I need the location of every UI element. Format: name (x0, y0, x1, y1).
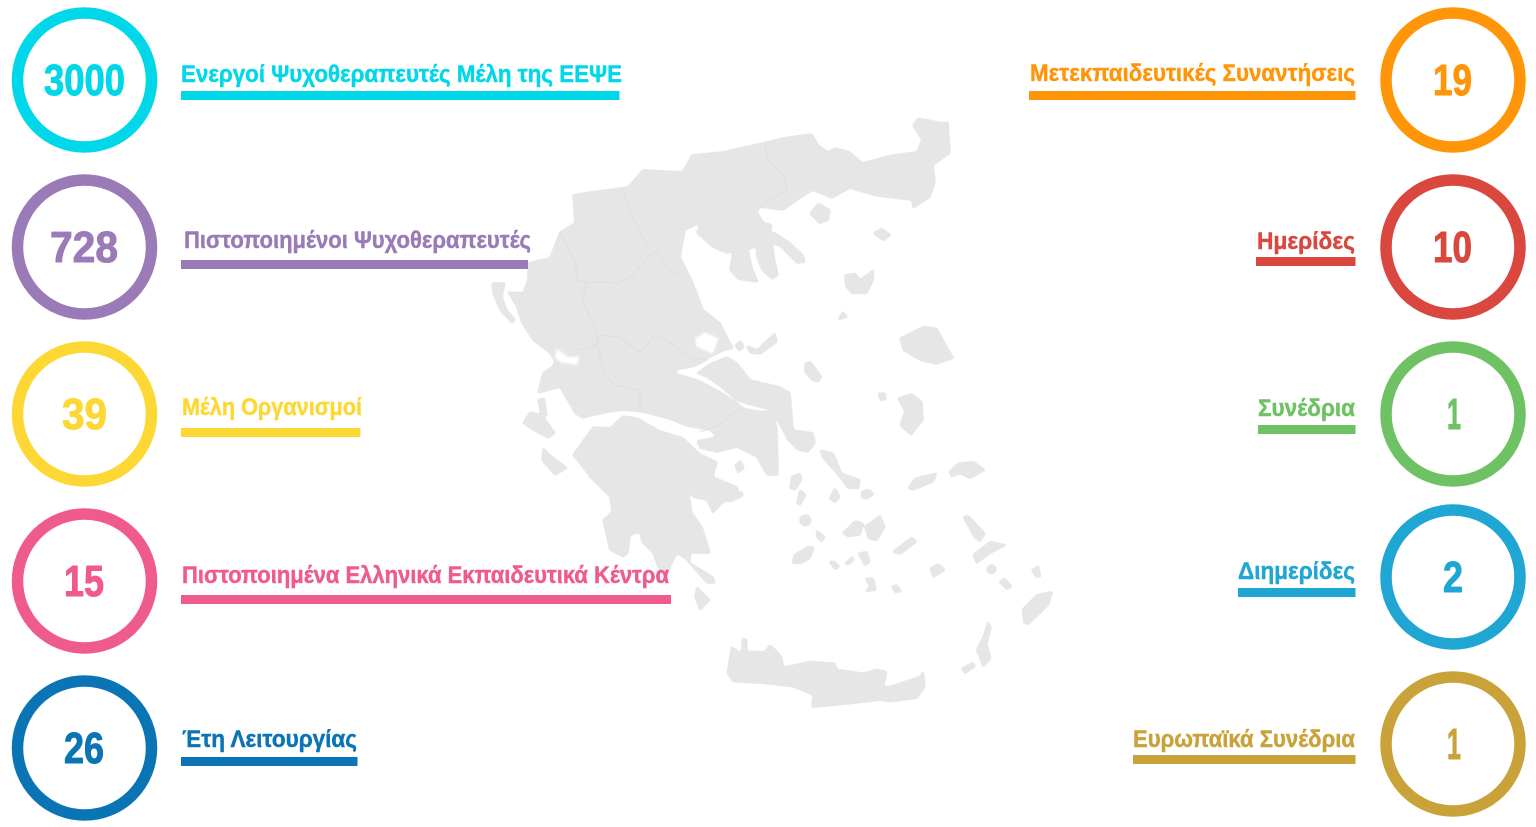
stat: one-day events: 10 (1433, 223, 1472, 272)
Ambracian gulf (556, 350, 578, 364)
stat: member organisations: 39 (62, 390, 107, 439)
stat: one-day events: Ημερίδες (1257, 228, 1355, 255)
stat: postgraduate meetings: 19 (1433, 56, 1472, 105)
Sporades, Argo-Saronic islands (735, 341, 744, 351)
Peloponnese (573, 416, 740, 583)
stat: certified training centres: 15 (64, 557, 104, 606)
Ionian islands (492, 283, 515, 323)
stat: conferences: 1 (1447, 390, 1461, 439)
north Aegean islands (805, 203, 953, 401)
stat: postgraduate meetings (1029, 13, 1520, 147)
stat: conferences (1258, 347, 1520, 481)
stat: active members (18, 13, 622, 147)
stat: two-day events: 2 (1443, 553, 1463, 602)
Chios (898, 394, 923, 435)
stat: member organisations: Μέλη Οργανισμοί (182, 394, 362, 421)
stat: european conferences (1133, 677, 1520, 811)
stat: active members: 3000 (44, 56, 125, 105)
stat: certified psychotherapists: Πιστοποιημένοι Ψυχοθεραπευτές (184, 227, 531, 254)
stat: certified training centres: Πιστοποιημένα Ελληνικά Εκπαιδευτικά Κέντρα (182, 562, 669, 589)
stat: european conferences: Ευρωπαϊκά Συνέδρια (1133, 726, 1355, 753)
stat: years of operation (18, 681, 358, 815)
stat: years of operation: 26 (64, 724, 104, 773)
stat: postgraduate meetings: Μετεκπαιδευτικές Συναντήσεις (1030, 60, 1355, 87)
stat: two-day events (1238, 510, 1520, 644)
stat: years of operation: Έτη Λειτουργίας (182, 726, 357, 753)
stat: certified psychotherapists: 728 (50, 223, 118, 272)
map of Greece (492, 118, 1052, 707)
stat: conferences: Συνέδρια (1258, 395, 1355, 422)
stat: one-day events (1256, 180, 1520, 314)
stat: european conferences: 1 (1447, 720, 1461, 769)
stat: member organisations (18, 347, 362, 481)
stat: active members: Ενεργοί Ψυχοθεραπευτές Μέλη της ΕΕΨΕ (181, 61, 622, 88)
Evia (697, 357, 815, 452)
stat: certified training centres (18, 514, 671, 648)
Pagasetic gulf (696, 333, 718, 353)
stat: two-day events: Διημερίδες (1238, 558, 1355, 585)
Cyclades, Dodecanese and Crete (727, 450, 1052, 707)
stat: certified psychotherapists (18, 180, 531, 314)
mainland north and centre (508, 118, 950, 475)
